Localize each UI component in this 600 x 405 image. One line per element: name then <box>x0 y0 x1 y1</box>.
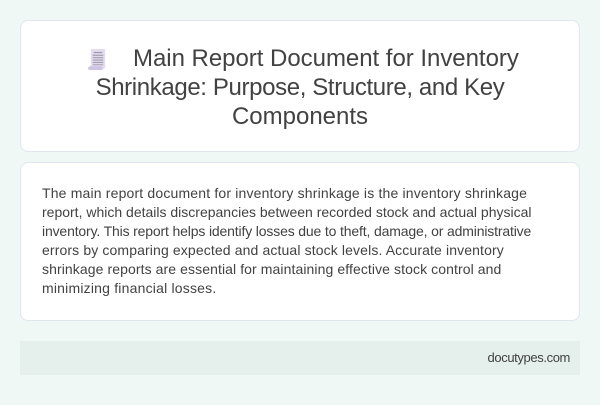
title <box>96 45 519 130</box>
text block: description: errors by comparing expected and actual stock levels. Accurate inventory <box>42 242 504 258</box>
text block: description: report, which details discrepancies between recorded stock and actual physical <box>42 204 532 220</box>
title: Shrinkage: Purpose, Structure, and Key <box>96 74 504 101</box>
text block: description: minimizing financial losses. <box>42 280 216 296</box>
text block: description <box>42 185 532 296</box>
icon: report document <box>88 49 106 70</box>
text block: description: The main report document for inventory shrinkage is the inventory shrinkage <box>42 185 527 201</box>
footer bar <box>20 341 580 375</box>
title: Components <box>232 103 368 130</box>
panel: title card <box>20 20 580 152</box>
panel: description card <box>20 162 580 321</box>
text block: description: shrinkage reports are essential for maintaining effective stock control and <box>42 261 501 277</box>
title: Main Report Document for Inventory <box>133 45 519 72</box>
text block: description: inventory. This report helps identify losses due to theft, damage, or administrative <box>42 223 531 239</box>
footer source text: docutypes.com <box>488 350 570 365</box>
